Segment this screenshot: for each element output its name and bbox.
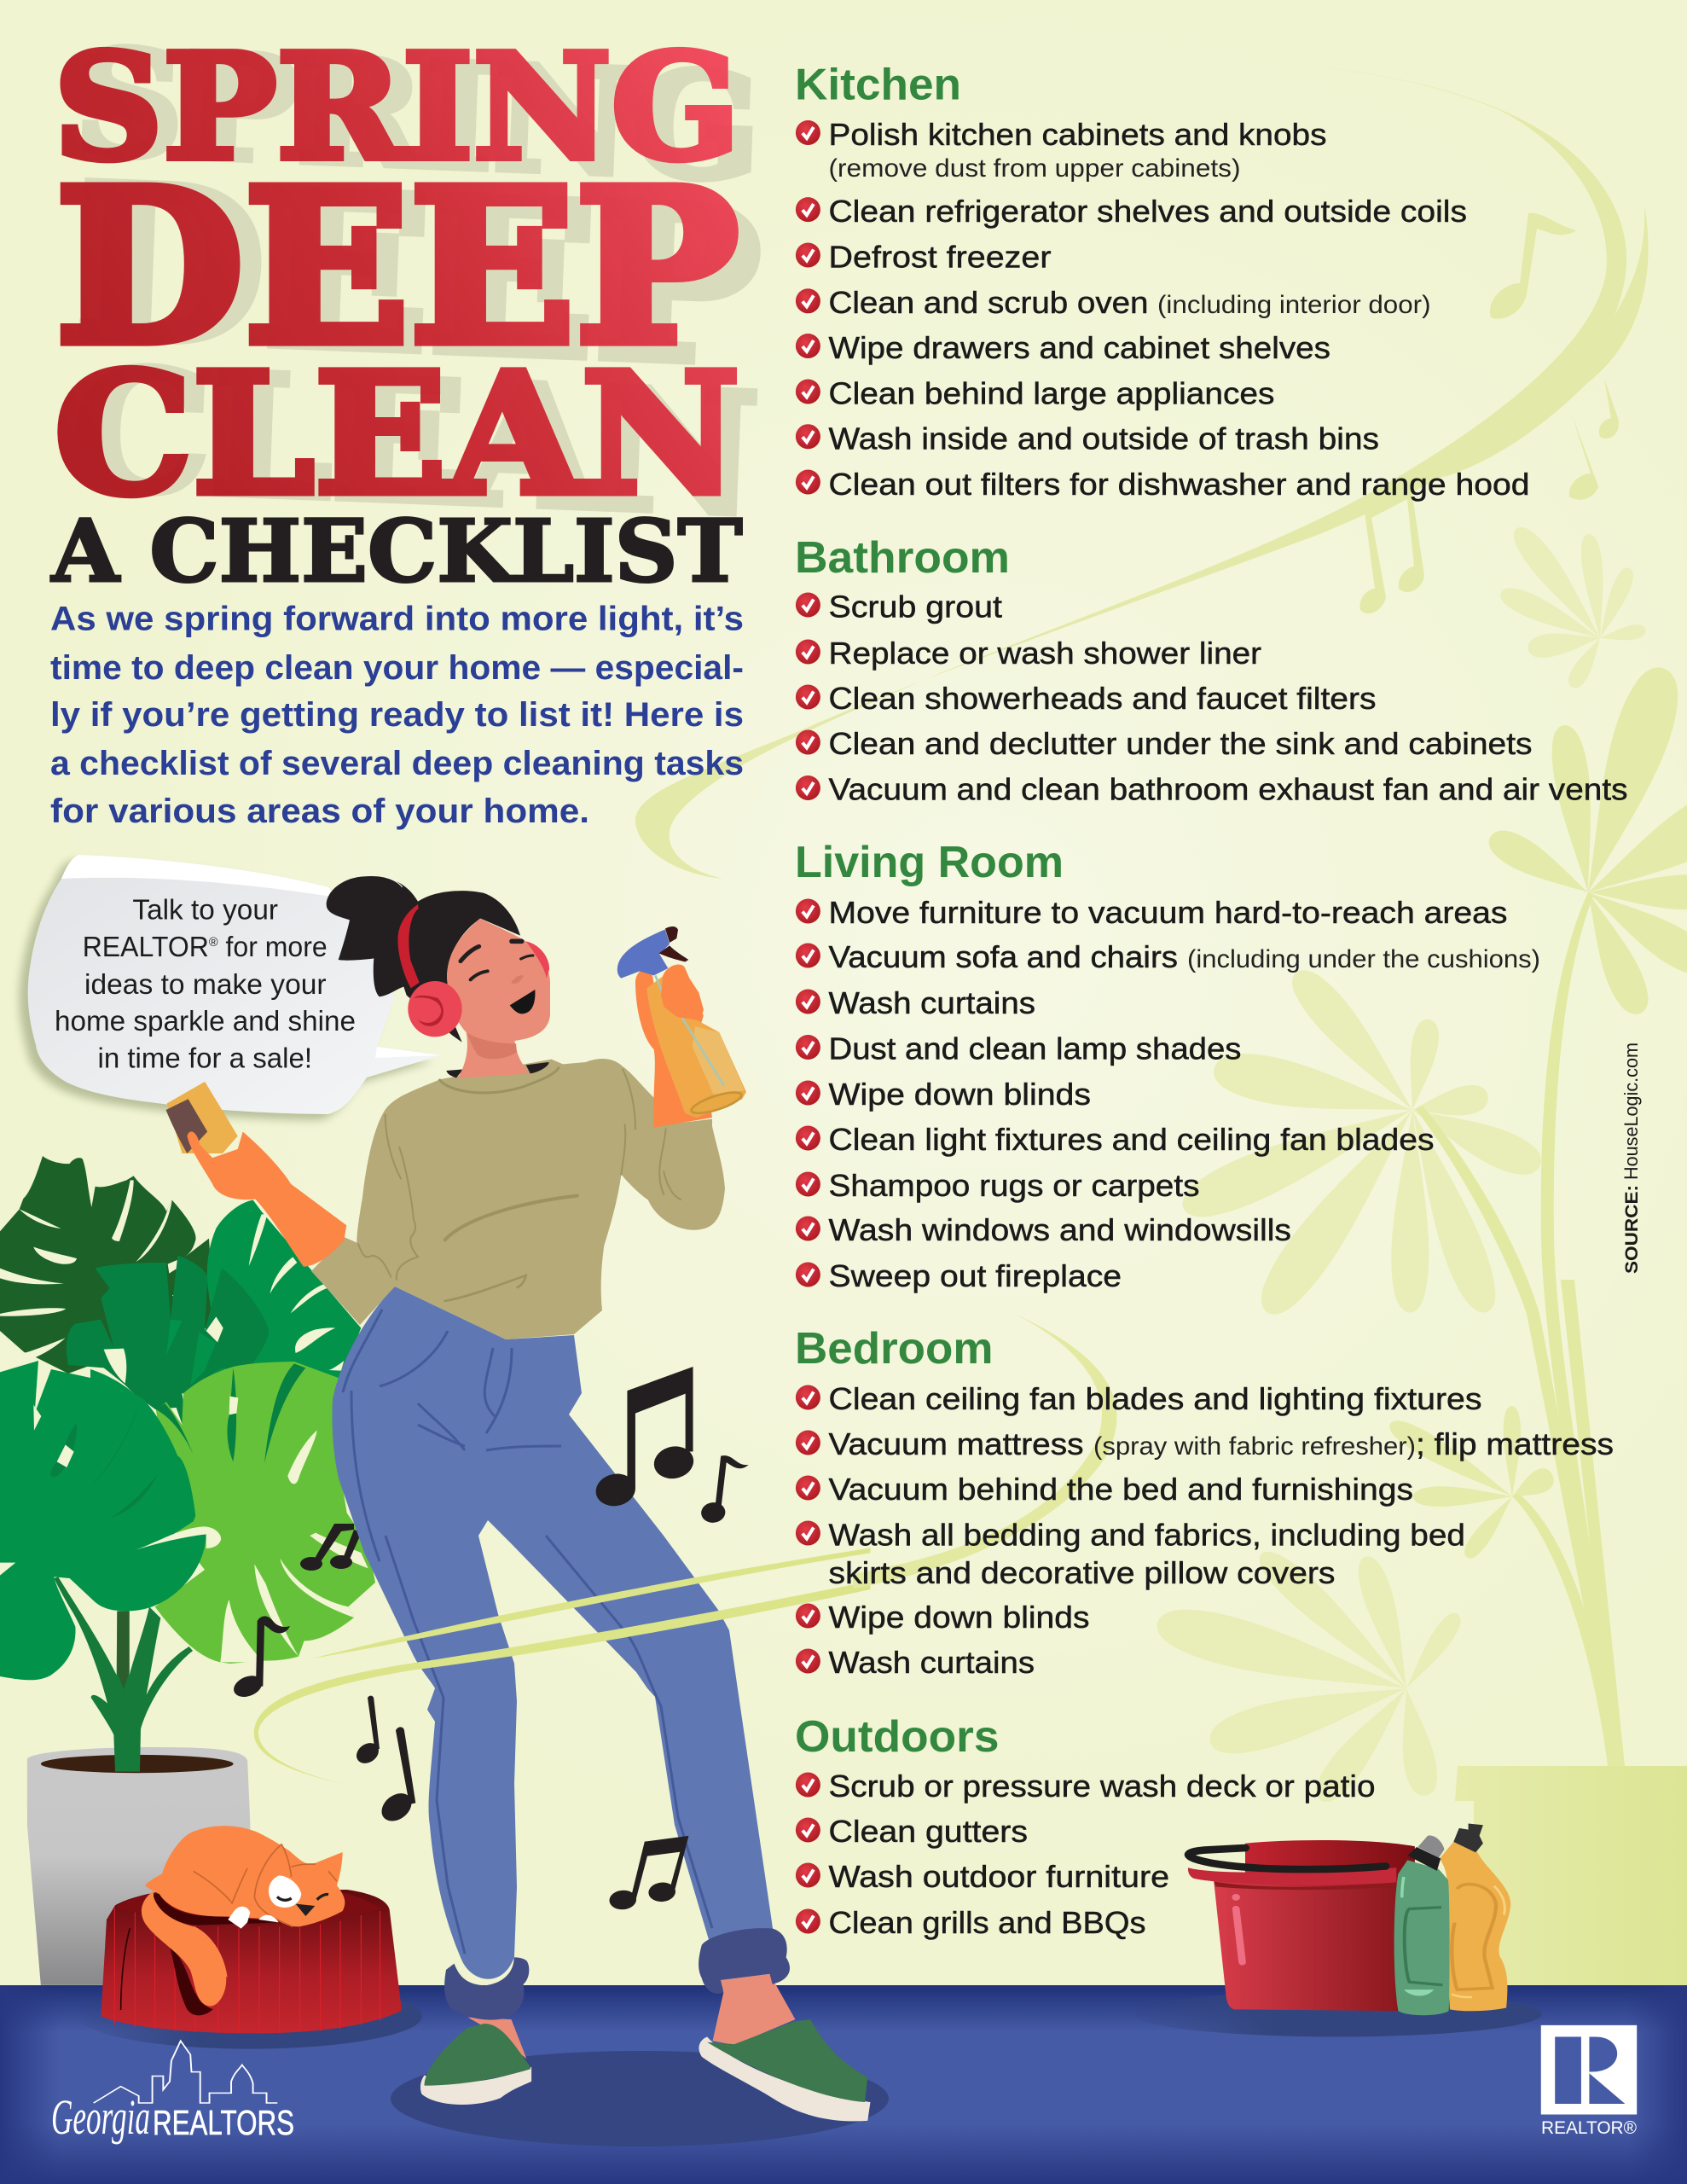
speech bubble: talk to your realtor — [20, 855, 441, 1120]
title shadow layer: DEEP — [72, 139, 764, 412]
item: Vacuum sofa and chairs — [829, 939, 1178, 974]
cushion and sleeping cat — [78, 1826, 422, 2049]
leaf: dark monstera — [0, 1156, 215, 1374]
item: Wash inside and outside of trash bins — [829, 421, 1379, 456]
swirl continuation behind right column — [853, 1314, 1117, 1589]
logo: Georgia Realtors — [51, 2041, 294, 2145]
item: Wipe down blinds — [829, 1077, 1091, 1112]
item: Clean and declutter under the sink and cabinets — [829, 726, 1532, 761]
sweeping lime swirl around legs — [254, 1548, 870, 1787]
heading: Bedroom: Bedroom — [795, 1324, 993, 1374]
sweater — [311, 1059, 725, 1339]
heading: Bathroom: Bathroom — [795, 533, 1010, 583]
item: Defrost freezer — [829, 239, 1052, 275]
bubble text: Talk to your — [132, 894, 278, 925]
headband and earmuff — [397, 904, 462, 1037]
item: Clean showerheads and faucet filters — [829, 681, 1377, 716]
item: Wash outdoor furniture — [829, 1859, 1169, 1894]
white R square — [1541, 2025, 1637, 2115]
bubble text: home sparkle and shine — [55, 1005, 356, 1037]
bubble text: for more — [218, 931, 328, 962]
item: Vacuum mattress — [829, 1426, 1083, 1461]
note: flag note by plant — [230, 1616, 290, 1701]
neck — [458, 1032, 530, 1078]
section: Living Room — [795, 838, 1540, 1293]
section: Kitchen — [795, 60, 1530, 502]
leaf: mid green monstera — [182, 1200, 361, 1393]
bucket and cleaning bottles — [1133, 1823, 1542, 2036]
leaf: bright green bottom — [0, 1361, 221, 1680]
skyline outline — [94, 2041, 277, 2103]
heading: Living Room: Living Room — [795, 838, 1064, 887]
item: ; flip mattress — [1416, 1426, 1614, 1461]
left shoe — [420, 2024, 531, 2105]
title: Spring Deep Clean — [54, 17, 764, 553]
subtitle: A Checklist: A CHECKLIST — [50, 501, 743, 601]
item — [796, 939, 1540, 974]
item: Wash windows and windowsills — [829, 1212, 1291, 1247]
intro paragraph: time to deep clean your home — especial- — [50, 649, 744, 687]
item: (including interior door) — [1157, 291, 1431, 319]
item: Clean gutters — [829, 1814, 1028, 1849]
item: Scrub grout — [829, 589, 1002, 624]
item — [796, 117, 1327, 183]
item: Clean light fixtures and ceiling fan blades — [829, 1122, 1435, 1157]
floor — [0, 1985, 1687, 2184]
intro paragraph — [50, 601, 744, 830]
item: Vacuum behind the bed and furnishings — [829, 1472, 1413, 1507]
bubble text: in time for a sale! — [97, 1043, 312, 1073]
right shoe — [699, 2019, 870, 2121]
intro paragraph: a checklist of several deep cleaning tasks — [50, 745, 744, 782]
plant leaves — [0, 1156, 375, 1680]
left glove and sponge — [166, 1082, 346, 1267]
note: middle large note — [376, 1727, 417, 1827]
cushion shadow — [78, 1984, 422, 2049]
heading: Kitchen: Kitchen — [795, 60, 961, 109]
logo text: REALTOR: REALTOR® — [1541, 2118, 1638, 2138]
source credit: HouseLogic.com — [1620, 1043, 1642, 1180]
title shadow layer: CLEAN — [69, 331, 762, 553]
hair — [327, 876, 520, 1043]
item: skirts and decorative pillow covers — [829, 1555, 1336, 1590]
item: Vacuum and clean bathroom exhaust fan and air vents — [829, 771, 1627, 807]
background decorative flowers and potted plant silhouette — [1151, 520, 1687, 1985]
right glove and spray bottle — [617, 926, 746, 1128]
note: lower double note — [606, 1836, 688, 1913]
checklist — [795, 60, 1627, 1940]
item — [796, 1517, 1465, 1590]
bubble text: REALTOR — [83, 931, 213, 962]
music notes — [230, 1367, 749, 1913]
item: Clean refrigerator shelves and outside coils — [829, 194, 1467, 229]
logo text: REALTORS: REALTORS — [153, 2103, 294, 2142]
ankles — [468, 1974, 795, 2059]
bubble text — [55, 894, 356, 1073]
heading: Outdoors: Outdoors — [795, 1712, 1000, 1762]
item: Clean and scrub oven — [829, 285, 1148, 320]
note: middle small note — [352, 1696, 383, 1768]
item: (spray with fabric refresher) — [1093, 1432, 1416, 1461]
item: Replace or wash shower liner — [829, 636, 1261, 671]
face — [447, 919, 550, 1042]
jean cuffs — [444, 1928, 790, 2020]
sweater collar neckline — [446, 1062, 548, 1077]
bubble text: ® — [209, 935, 218, 950]
red bucket — [1188, 1840, 1415, 2011]
cat — [142, 1826, 345, 2015]
item: Sweep out fireplace — [829, 1258, 1122, 1293]
title shadow layer — [69, 17, 764, 553]
plant pot with soil — [27, 1747, 250, 1985]
item: Move furniture to vacuum hard-to-reach areas — [829, 895, 1508, 930]
logo text: Georgia: Georgia — [51, 2089, 150, 2145]
item: Clean out filters for dishwasher and range hood — [829, 467, 1530, 502]
intro paragraph: As we spring forward into more light, it’s — [50, 601, 744, 638]
leaf: deep green front — [67, 1256, 269, 1456]
item: Clean behind large appliances — [829, 375, 1274, 411]
jeans — [332, 1287, 773, 1979]
item: Wipe down blinds — [829, 1600, 1090, 1635]
bubble text: ideas to make your — [84, 968, 327, 1000]
bucket shadow — [1133, 1991, 1542, 2036]
section: Bedroom — [795, 1324, 1614, 1680]
plant stems — [54, 1577, 193, 1772]
intro paragraph: ly if you’re getting ready to list it! Here is — [50, 696, 744, 734]
floor shadow under feet — [391, 2051, 889, 2146]
item: Wash all bedding and fabrics, including bed — [829, 1517, 1465, 1553]
item: (including under the cushions) — [1187, 945, 1540, 973]
item: Wash curtains — [829, 1645, 1035, 1680]
facial features — [461, 941, 535, 1014]
item: Clean ceiling fan blades and lighting fixtures — [829, 1381, 1482, 1416]
word: SPRING: SPRING — [54, 22, 740, 193]
item: Dust and clean lamp shades — [829, 1031, 1242, 1066]
word: DEEP: DEEP — [55, 144, 739, 392]
note: large double note — [589, 1367, 749, 1526]
character: woman singing into spray bottle — [166, 876, 870, 2121]
title shadow layer: SPRING — [72, 17, 764, 214]
item: Polish kitchen cabinets and knobs — [829, 117, 1327, 152]
word: CLEAN: CLEAN — [55, 336, 740, 531]
item: Shampoo rugs or carpets — [829, 1168, 1199, 1203]
section: Bathroom — [795, 533, 1627, 807]
item — [796, 1426, 1614, 1461]
item: Wipe drawers and cabinet shelves — [829, 330, 1330, 365]
item: Wash curtains — [829, 985, 1035, 1020]
red cushion — [101, 1890, 402, 2033]
source credit — [1620, 1043, 1642, 1274]
note: double note on leaf — [300, 1524, 362, 1571]
section: Outdoors — [795, 1712, 1375, 1940]
yellow bottle — [1440, 1823, 1510, 2011]
item: Scrub or pressure wash deck or patio — [829, 1769, 1375, 1804]
intro paragraph: for various areas of your home. — [50, 793, 589, 830]
leaf: lime monstera — [155, 1362, 375, 1664]
green bottle — [1394, 1836, 1450, 2015]
item: Clean grills and BBQs — [829, 1905, 1146, 1940]
item: (remove dust from upper cabinets) — [829, 154, 1240, 183]
logo: Realtor R block — [1541, 2025, 1638, 2138]
source credit: SOURCE: — [1622, 1185, 1642, 1274]
background music notes and large swoosh — [635, 62, 1649, 879]
note: small flag note — [697, 1455, 749, 1526]
item — [796, 285, 1431, 320]
